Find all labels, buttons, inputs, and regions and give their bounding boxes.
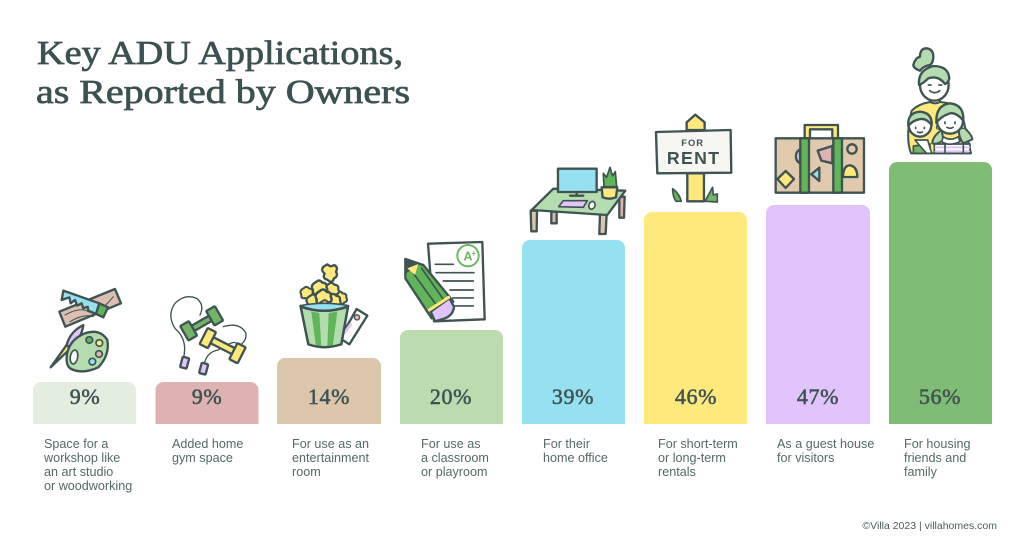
- icon: desk with computer and plant: [531, 167, 625, 234]
- label: entertainment: entertainment: [292, 451, 370, 465]
- bar: entertainment room 14%: [277, 358, 381, 424]
- bar: workshop 9%: 9%: [70, 384, 100, 409]
- icon: for rent sign: FOR: [681, 138, 704, 148]
- icon: suitcase with stickers: [776, 125, 864, 193]
- label: classroom: For use as: [421, 437, 480, 451]
- label: classroom: or playroom: [421, 465, 488, 479]
- label: family: friends and: [904, 451, 966, 465]
- icon: saw, wood and palette: [51, 289, 121, 371]
- title: [36, 35, 410, 111]
- bar: home office 39%: [522, 240, 625, 424]
- label: guest house: for visitors: [777, 451, 834, 465]
- label: rentals: For short-term: [658, 437, 738, 451]
- icon: graded paper and pencil: A: [463, 250, 472, 264]
- label: home gym: Added home: [172, 437, 243, 451]
- label: rentals: or long-term: [658, 451, 726, 465]
- icon: graded paper and pencil: [405, 242, 485, 321]
- label: home office: For their: [543, 437, 590, 451]
- bar: friends and family 56%: [889, 162, 992, 424]
- bar: classroom 20%: [400, 330, 503, 424]
- icon: popcorn and remote: [300, 264, 367, 347]
- label: entertainment: For use as an: [292, 437, 369, 451]
- bar: workshop 9%: [33, 382, 136, 424]
- bar: guest house 47%: 47%: [797, 384, 839, 409]
- title: as Reported by Owners: [36, 74, 410, 111]
- bar: entertainment room 14%: 14%: [308, 384, 350, 409]
- bar: classroom 20%: 20%: [430, 384, 472, 409]
- label: home gym: gym space: [172, 451, 233, 465]
- title: Key ADU Applications,: [37, 35, 403, 72]
- label: rentals: rentals: [658, 465, 696, 479]
- bar: home gym 9%: [156, 382, 258, 424]
- icon: for rent sign: [656, 115, 731, 202]
- icon: mother with two children: [908, 48, 972, 153]
- icon: graded paper and pencil: +: [471, 249, 476, 258]
- footer credit: ©Villa 2023 | villahomes.com: [862, 520, 997, 532]
- label: guest house: As a guest house: [777, 437, 874, 451]
- label: workshop: workshop like: [43, 451, 120, 465]
- bar: home gym 9%: 9%: [192, 384, 222, 409]
- label: workshop: Space for a: [44, 437, 108, 451]
- bar: rentals 46%: 46%: [675, 384, 717, 409]
- bar: rentals 46%: [644, 212, 747, 424]
- label: workshop: an art studio: [44, 465, 113, 479]
- label: family: family: [904, 465, 938, 479]
- label: home office: home office: [543, 451, 608, 465]
- bar: friends and family 56%: 56%: [919, 384, 961, 409]
- label: classroom: a classroom: [421, 451, 489, 465]
- icon: dumbbells and jump rope: [171, 297, 246, 375]
- bar: guest house 47%: [766, 205, 870, 424]
- label: entertainment: room: [292, 465, 321, 479]
- bar: home office 39%: 39%: [552, 384, 594, 409]
- label: family: For housing: [904, 437, 971, 451]
- icon: for rent sign: RENT: [667, 148, 720, 168]
- label: workshop: or woodworking: [44, 479, 132, 493]
